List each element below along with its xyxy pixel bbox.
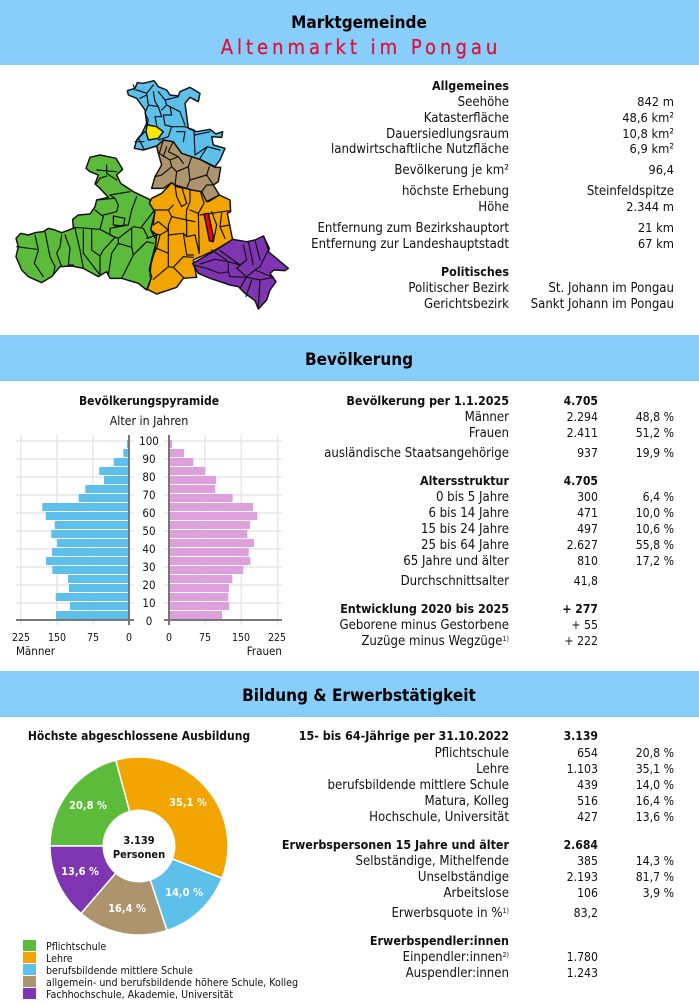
population pyramid chart: 150 <box>48 632 66 644</box>
legend: education: Fachhochschule, Akademie, Universität <box>46 989 233 1001</box>
table: Bildung percentages: 35,1 % <box>636 762 674 776</box>
table: Bevölkerung labels: Entwicklung 2020 bis 2025 <box>340 601 509 616</box>
table: Bildung values: 1.780 <box>567 950 598 964</box>
population pyramid chart: 10 <box>142 596 156 610</box>
population pyramid chart: 20 <box>142 578 156 592</box>
population pyramid chart: 90 <box>142 452 156 466</box>
table: Bevölkerung percentages <box>636 410 674 568</box>
table: Bevölkerung values: 810 <box>577 554 598 568</box>
table: Allgemeines values: 96,4 <box>648 163 674 178</box>
table: Bildung percentages: 3,9 % <box>643 886 674 900</box>
table: Bildung values: 2.193 <box>567 870 598 884</box>
donut chart: education: 13,6 % <box>61 865 99 878</box>
table: Bevölkerung labels: Männer <box>465 410 509 425</box>
population pyramid chart: 75 <box>199 632 211 644</box>
table: Bildung labels: Erwerbsquote in % <box>391 906 503 921</box>
table: Bevölkerung values: 2.411 <box>567 426 598 440</box>
header band: title <box>0 0 699 65</box>
axis title: Alter in Jahren: Alter in Jahren <box>110 414 188 428</box>
table: Allgemeines labels: Höhe <box>478 200 509 215</box>
table: Allgemeines labels: Politisches <box>441 264 509 279</box>
table: Bildung labels: 2) <box>503 951 509 959</box>
table: Allgemeines labels: Katasterfläche <box>424 111 509 126</box>
donut chart: education: 14,0 % <box>165 886 203 899</box>
table: Bevölkerung values: 41,8 <box>574 574 598 588</box>
legend: education: berufsbildende mittlere Schule <box>46 965 193 977</box>
table: Bildung percentages: 81,7 % <box>636 870 674 884</box>
table: Bevölkerung values: 300 <box>577 490 598 504</box>
header band: title: Altenmarkt im Pongau <box>221 35 501 59</box>
table: Bevölkerung labels: 0 bis 5 Jahre <box>436 490 509 505</box>
table: Bildung labels: Einpendler:innen <box>403 950 503 965</box>
table: Bevölkerung percentages: 51,2 % <box>636 426 674 440</box>
table: Bevölkerung values: + 277 <box>562 602 598 616</box>
legend: education <box>23 940 298 1001</box>
population pyramid chart: 75 <box>87 632 99 644</box>
population pyramid chart: 40 <box>142 542 156 556</box>
donut chart: education: 16,4 % <box>108 902 146 915</box>
table: Bevölkerung percentages: 6,4 % <box>643 490 674 504</box>
table: Bildung labels: Unselbständige <box>418 870 509 885</box>
table: Bevölkerung labels: Zuzüge minus Wegzüge <box>361 634 503 649</box>
table: Allgemeines values: 67 km <box>638 237 674 252</box>
table: Allgemeines labels: Politischer Bezirk <box>408 281 509 296</box>
population pyramid chart: 80 <box>142 470 156 484</box>
donut chart: education: Personen <box>113 848 165 861</box>
table: Bevölkerung values: 497 <box>577 522 598 536</box>
table: Bildung values: 1.243 <box>567 966 598 980</box>
table: Bildung labels <box>282 728 509 981</box>
table: Bildung labels: Selbständige, Mithelfende <box>355 854 509 869</box>
table: Allgemeines values: Steinfeldspitze <box>587 184 674 199</box>
table: Allgemeines values: 48,6 km² <box>622 111 674 126</box>
table: Allgemeines values <box>531 95 674 312</box>
population pyramid chart <box>12 434 286 658</box>
table: Bildung labels: Lehre <box>476 762 509 777</box>
table: Allgemeines values: Sankt Johann im Pongau <box>531 297 674 312</box>
donut chart: education: 20,8 % <box>69 799 107 812</box>
population pyramid chart: Frauen <box>247 644 282 658</box>
table: Bevölkerung labels: 15 bis 24 Jahre <box>421 522 509 537</box>
table: Bildung percentages: 16,4 % <box>636 794 674 808</box>
table: Bildung percentages: 20,8 % <box>636 746 674 760</box>
table: Bildung labels: Arbeitslose <box>443 886 509 901</box>
table: Bildung percentages: 13,6 % <box>636 810 674 824</box>
table: Allgemeines values: 842 m <box>637 95 674 110</box>
table: Bildung percentages <box>636 746 674 900</box>
table: Bevölkerung values: 2.294 <box>567 410 598 424</box>
table: Allgemeines values: 10,8 km² <box>622 127 674 142</box>
table: Bevölkerung values: + 55 <box>571 618 598 632</box>
table: Bevölkerung values: + 222 <box>564 634 598 648</box>
population pyramid chart: 30 <box>142 560 156 574</box>
table: Allgemeines values: 6,9 km² <box>630 142 674 157</box>
table: Bildung values: 2.684 <box>564 838 598 852</box>
table: Bildung values: 1.103 <box>567 762 598 776</box>
table: Bevölkerung labels: 25 bis 64 Jahre <box>421 538 509 553</box>
population pyramid chart: 60 <box>142 506 156 520</box>
table: Bevölkerung values: 2.627 <box>567 538 598 552</box>
map: Salzburg districts <box>16 81 288 309</box>
table: Bevölkerung labels: Frauen <box>469 426 509 441</box>
population pyramid chart: 50 <box>142 524 156 538</box>
population pyramid chart: 225 <box>268 632 286 644</box>
population pyramid chart: 0 <box>166 632 172 644</box>
table: Allgemeines labels: Entfernung zum Bezirkshauptort <box>317 221 509 236</box>
section band: Bevölkerung <box>0 335 699 381</box>
population pyramid chart: 225 <box>12 632 30 644</box>
table: Bildung labels: Hochschule, Universität <box>369 810 509 825</box>
table: Bevölkerung labels: 1) <box>503 635 509 643</box>
legend: education: allgemein- und berufsbildende höhere Schule, Kolleg <box>46 977 298 989</box>
table: Bildung values: 427 <box>577 810 598 824</box>
table: Bevölkerung labels: Geborene minus Gestorbene <box>339 618 509 633</box>
table: Bildung labels: berufsbildende mittlere Schule <box>328 778 509 793</box>
population pyramid chart: 0 <box>126 632 132 644</box>
table: Bildung percentages: 14,3 % <box>636 854 674 868</box>
table: Bevölkerung labels: 6 bis 14 Jahre <box>428 506 509 521</box>
table: Allgemeines values: 21 km <box>638 221 674 236</box>
donut chart: education <box>50 757 228 935</box>
table: Bevölkerung labels: Bevölkerung per 1.1.2025 <box>346 393 509 408</box>
table: Bildung labels: Erwerbspersonen 15 Jahre und älter <box>282 837 509 852</box>
table: Allgemeines labels: Seehöhe <box>458 95 509 110</box>
section band: Bildung & Erwerbstätigkeit <box>0 671 699 717</box>
table: Bildung values: 385 <box>577 854 598 868</box>
table: Bildung labels: Auspendler:innen <box>406 966 509 981</box>
table: Allgemeines labels: landwirtschaftliche Nutzfläche <box>331 142 509 157</box>
table: Bevölkerung percentages: 10,6 % <box>636 522 674 536</box>
population pyramid chart: 150 <box>232 632 250 644</box>
table: Bildung values: 83,2 <box>574 906 598 920</box>
table: Bevölkerung labels: Durchschnittsalter <box>401 574 509 589</box>
table: Bildung values: 106 <box>577 886 598 900</box>
table: Bevölkerung labels: 65 Jahre und älter <box>403 554 509 569</box>
section band: Bildung & Erwerbstätigkeit: Bildung & Erwerbstätigkeit <box>242 686 476 706</box>
table: Bildung labels: 15- bis 64-Jährige per 31.10.2022 <box>299 728 509 743</box>
donut chart: education: 3.139 <box>123 834 155 847</box>
table: Allgemeines labels: Bevölkerung je km² <box>394 163 509 178</box>
table: Bevölkerung values: 4.705 <box>564 394 598 408</box>
table: Allgemeines labels <box>311 78 509 312</box>
table: Bevölkerung values: 471 <box>577 506 598 520</box>
heading: Höchste abgeschlossene Ausbildung: Höchste abgeschlossene Ausbildung <box>28 729 250 743</box>
table: Bildung values: 516 <box>577 794 598 808</box>
table: Allgemeines labels: Allgemeines <box>432 78 509 93</box>
table: Bildung values <box>564 729 598 980</box>
table: Bevölkerung percentages: 48,8 % <box>636 410 674 424</box>
table: Bevölkerung percentages: 19,9 % <box>636 446 674 460</box>
table: Bevölkerung values: 937 <box>577 446 598 460</box>
table: Bevölkerung values: 4.705 <box>564 474 598 488</box>
table: Bildung labels: Erwerbspendler:innen <box>370 933 509 948</box>
table: Allgemeines values: 2.344 m <box>626 200 674 215</box>
section band: Bevölkerung: Bevölkerung <box>305 350 413 370</box>
header band: title: Marktgemeinde <box>291 13 427 33</box>
population pyramid chart: 0 <box>146 614 152 628</box>
table: Bevölkerung percentages: 10,0 % <box>636 506 674 520</box>
legend: education: Pflichtschule <box>46 941 106 953</box>
table: Bevölkerung labels: ausländische Staatsangehörige <box>324 446 509 461</box>
table: Allgemeines labels: höchste Erhebung <box>402 184 509 199</box>
table: Bildung values: 439 <box>577 778 598 792</box>
table: Bildung percentages: 14,0 % <box>636 778 674 792</box>
legend: education: Lehre <box>46 953 73 965</box>
table: Bevölkerung labels <box>324 393 509 649</box>
population pyramid chart: Männer <box>16 644 56 658</box>
population pyramid chart: 70 <box>142 488 156 502</box>
table: Bildung values: 3.139 <box>564 729 598 743</box>
table: Bildung labels: Pflichtschule <box>435 746 509 761</box>
population pyramid chart: 100 <box>139 434 159 448</box>
table: Allgemeines labels: Dauersiedlungsraum <box>386 127 509 142</box>
table: Allgemeines values: St. Johann im Pongau <box>548 281 674 296</box>
table: Bevölkerung labels: Altersstruktur <box>420 473 509 488</box>
heading: Bevölkerungspyramide: Bevölkerungspyramide <box>79 394 219 408</box>
table: Bevölkerung percentages: 17,2 % <box>636 554 674 568</box>
table: Bevölkerung percentages: 55,8 % <box>636 538 674 552</box>
table: Allgemeines labels: Entfernung zur Landeshauptstadt <box>311 237 509 252</box>
table: Bevölkerung values <box>562 394 598 648</box>
donut chart: education: 35,1 % <box>169 796 207 809</box>
table: Allgemeines labels: Gerichtsbezirk <box>424 297 509 312</box>
table: Bildung values: 654 <box>577 746 598 760</box>
table: Bildung labels: Matura, Kolleg <box>424 794 509 809</box>
table: Bildung labels: 1) <box>503 907 509 915</box>
